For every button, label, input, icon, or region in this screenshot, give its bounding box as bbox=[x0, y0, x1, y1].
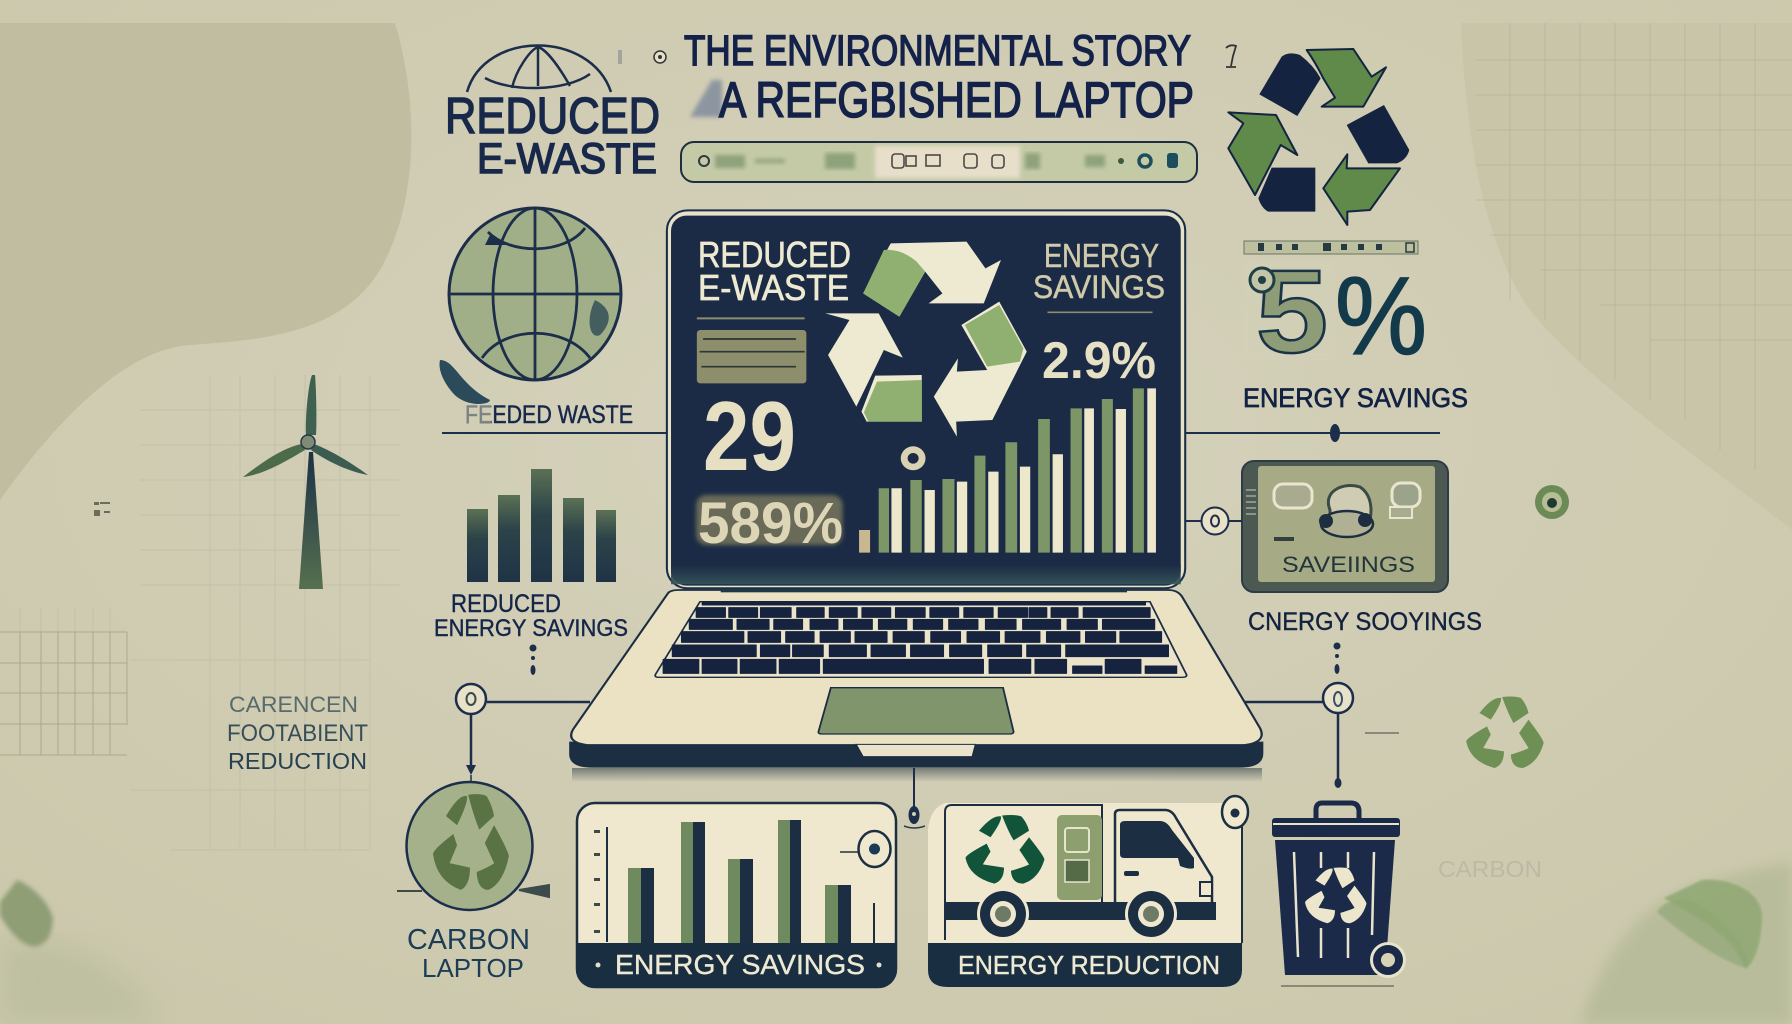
label: carbon footprint reduction: CARENCEN bbox=[229, 692, 358, 717]
laptop bbox=[569, 210, 1263, 782]
screen recycle symbol bbox=[825, 242, 1027, 437]
label: carbon footprint reduction: FOOTABIENT bbox=[227, 720, 368, 747]
cargo green label bbox=[1057, 815, 1102, 900]
panel: energy reduction truck bbox=[928, 796, 1248, 987]
label: carbon laptop bbox=[407, 924, 530, 983]
label: reduced energy savings: ENERGY SAVINGS bbox=[434, 615, 628, 642]
icon: carbon circle bbox=[397, 782, 549, 910]
icon: green dot bbox=[1535, 485, 1569, 519]
label: feeded waste: FEEDED WASTE bbox=[465, 401, 633, 429]
screen text bbox=[698, 234, 851, 308]
heading: reduced e-waste top left bbox=[445, 87, 660, 183]
laptop: 589% bbox=[698, 491, 843, 556]
connector: left to screen bbox=[442, 432, 668, 434]
heading: reduced e-waste top left: E-WASTE bbox=[477, 135, 657, 183]
connector node: savings device bbox=[1185, 508, 1242, 534]
screen data box bbox=[697, 330, 806, 383]
laptop base bbox=[569, 585, 1263, 768]
screen bars bbox=[859, 530, 870, 553]
bar chart: left bbox=[467, 469, 616, 582]
icon: recycling bin bbox=[1272, 803, 1406, 987]
panel: savings device bbox=[1242, 461, 1448, 592]
stat: 5 percent bbox=[1244, 246, 1427, 378]
trackpad bbox=[818, 688, 1014, 734]
icon: globe bbox=[449, 208, 621, 380]
label: reduced energy savings bbox=[434, 590, 628, 642]
laptop: ENERGY bbox=[1044, 237, 1159, 274]
stat: 5 percent: % bbox=[1335, 255, 1427, 378]
panel: savings device: SAVEIINGS bbox=[1282, 552, 1415, 577]
label: reduced energy savings: REDUCED bbox=[451, 590, 561, 618]
label: energy savings right: ENERGY SAVINGS bbox=[1243, 383, 1468, 413]
faint label: carbon: CARBON bbox=[1438, 856, 1542, 882]
connector node right bbox=[1245, 642, 1399, 788]
panel: energy savings chart bbox=[577, 803, 896, 987]
label: cnergy sooyings: CNERGY SOOYINGS bbox=[1248, 608, 1482, 636]
stat: 5 percent: 5 bbox=[1256, 246, 1328, 378]
connector right with pin bbox=[1185, 424, 1440, 442]
panel: energy savings chart: ENERGY SAVINGS bbox=[615, 949, 865, 980]
panel: energy reduction truck: ENERGY REDUCTION bbox=[958, 950, 1220, 980]
front notch bbox=[856, 744, 975, 757]
pin: centre bottom connector bbox=[904, 768, 925, 828]
connector dots left bbox=[530, 644, 536, 675]
truck wheels bbox=[977, 888, 1029, 940]
label: carbon footprint reduction bbox=[227, 692, 368, 774]
icon: wind turbine bbox=[243, 375, 368, 589]
heading: reduced e-waste top left: REDUCED bbox=[445, 87, 660, 144]
title: A REFGBISHED LAPTOP bbox=[719, 72, 1194, 128]
small icons near title bbox=[618, 45, 1236, 67]
subtitle pill bbox=[681, 142, 1197, 182]
laptop shadow bbox=[572, 768, 1262, 782]
laptop screen bbox=[667, 210, 1185, 588]
title bbox=[684, 27, 1194, 128]
laptop: 2.9% bbox=[1042, 332, 1156, 390]
leaf under globe bbox=[440, 360, 490, 404]
icon: globe dome bbox=[467, 46, 611, 92]
label: carbon laptop: LAPTOP bbox=[422, 953, 524, 983]
decorative green leaf: lower right bbox=[1581, 862, 1792, 1024]
small marks far left bbox=[94, 502, 110, 516]
title: THE ENVIRONMENTAL STORY bbox=[684, 27, 1191, 75]
connector node left bbox=[456, 684, 590, 782]
laptop: SAVINGS bbox=[1033, 269, 1165, 305]
screen text: REDUCED bbox=[698, 234, 851, 275]
screen text: E-WASTE bbox=[698, 267, 849, 308]
laptop: 29 bbox=[703, 381, 796, 491]
truck recycle icon bbox=[966, 815, 1044, 884]
icon: small green recycle bbox=[1466, 697, 1544, 768]
label: carbon footprint reduction: REDUCTION bbox=[228, 748, 367, 774]
icon: percentage stat top bar bbox=[1244, 241, 1418, 254]
decorative green leaf: lower left bbox=[0, 880, 160, 1024]
icon: large recycle symbol top right bbox=[1228, 49, 1409, 225]
label: carbon laptop: CARBON bbox=[407, 924, 530, 956]
truck cab bbox=[1115, 810, 1212, 905]
